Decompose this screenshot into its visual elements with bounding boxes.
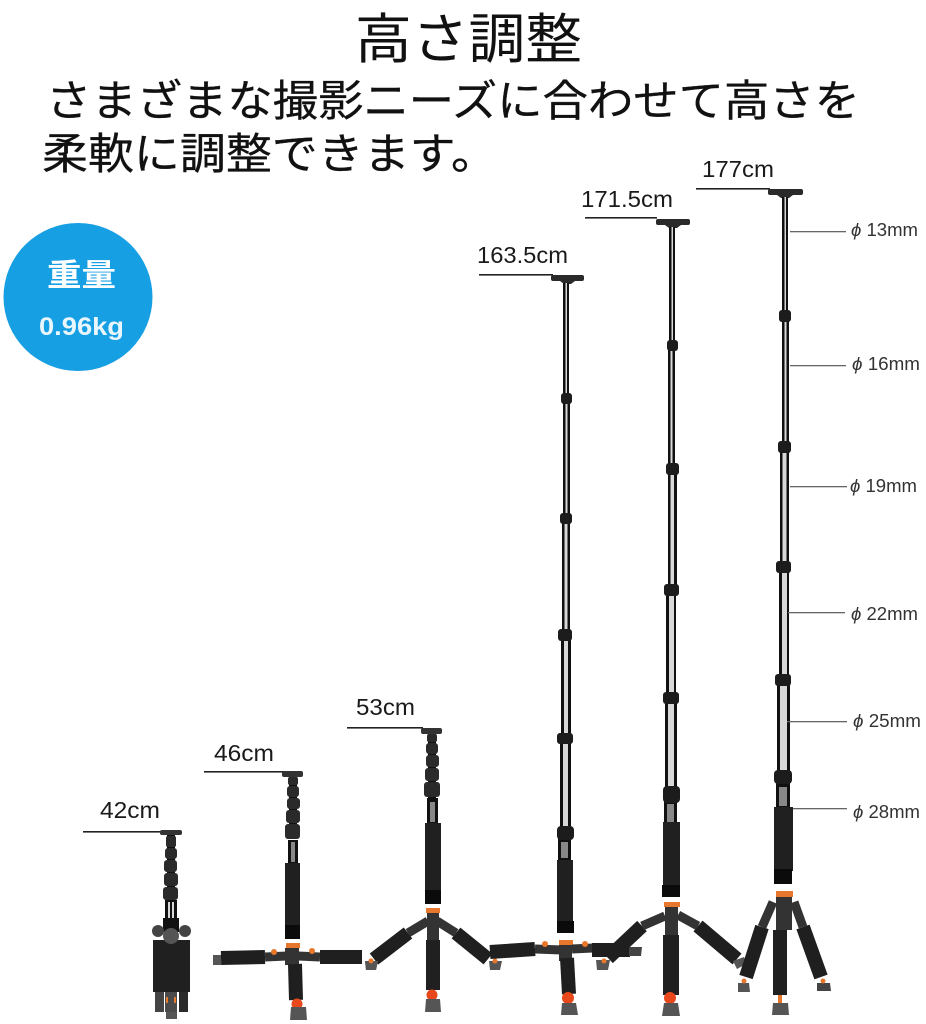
diameter label: 25mm xyxy=(787,711,921,731)
diameter label: 28mm: ϕ 28mm xyxy=(853,802,920,822)
diameter label: 19mm: ϕ 19mm xyxy=(850,476,917,496)
diameter label: 25mm: ϕ 25mm xyxy=(853,711,921,731)
tripod: 42cm folded xyxy=(83,797,191,1019)
tripod: 53cm xyxy=(347,694,502,1012)
height label 42cm: 42cm xyxy=(100,797,160,823)
height label 177cm: 177cm xyxy=(702,156,774,182)
tripod: 163.5cm xyxy=(477,242,642,1015)
diameter label: 13mm: ϕ 13mm xyxy=(851,220,918,240)
tripod: 177cm xyxy=(696,156,831,1015)
diameter label: 16mm: ϕ 16mm xyxy=(852,354,920,374)
height label 53cm xyxy=(347,694,423,729)
diameter label: 16mm xyxy=(790,354,920,374)
weight badge: 重量 xyxy=(47,258,116,293)
diameter label: 19mm xyxy=(790,476,917,496)
weight badge: 0.96kg xyxy=(39,313,124,341)
tripod: 46cm xyxy=(204,740,378,1020)
description text: さまざまな撮影ニーズに合わせて高さを xyxy=(46,78,860,126)
height label 163.5cm: 163.5cm xyxy=(477,242,568,268)
description text: 柔軟に調整できます。 xyxy=(42,131,497,179)
weight badge xyxy=(4,223,152,371)
diameter label: 28mm xyxy=(793,802,920,822)
description text xyxy=(42,78,860,179)
height label 46cm xyxy=(204,740,284,773)
diameter label: 22mm: ϕ 22mm xyxy=(851,604,918,624)
height label 53cm: 53cm xyxy=(356,694,415,720)
height label 42cm xyxy=(83,797,161,833)
height label 177cm xyxy=(696,156,774,190)
height label 171.5cm: 171.5cm xyxy=(581,186,673,212)
diameter label: 22mm xyxy=(788,604,918,624)
diameter label: 13mm xyxy=(790,220,918,240)
tripod: 171.5cm xyxy=(581,186,746,1016)
title: 高さ調整 xyxy=(355,10,582,70)
height label 46cm: 46cm xyxy=(214,740,274,766)
